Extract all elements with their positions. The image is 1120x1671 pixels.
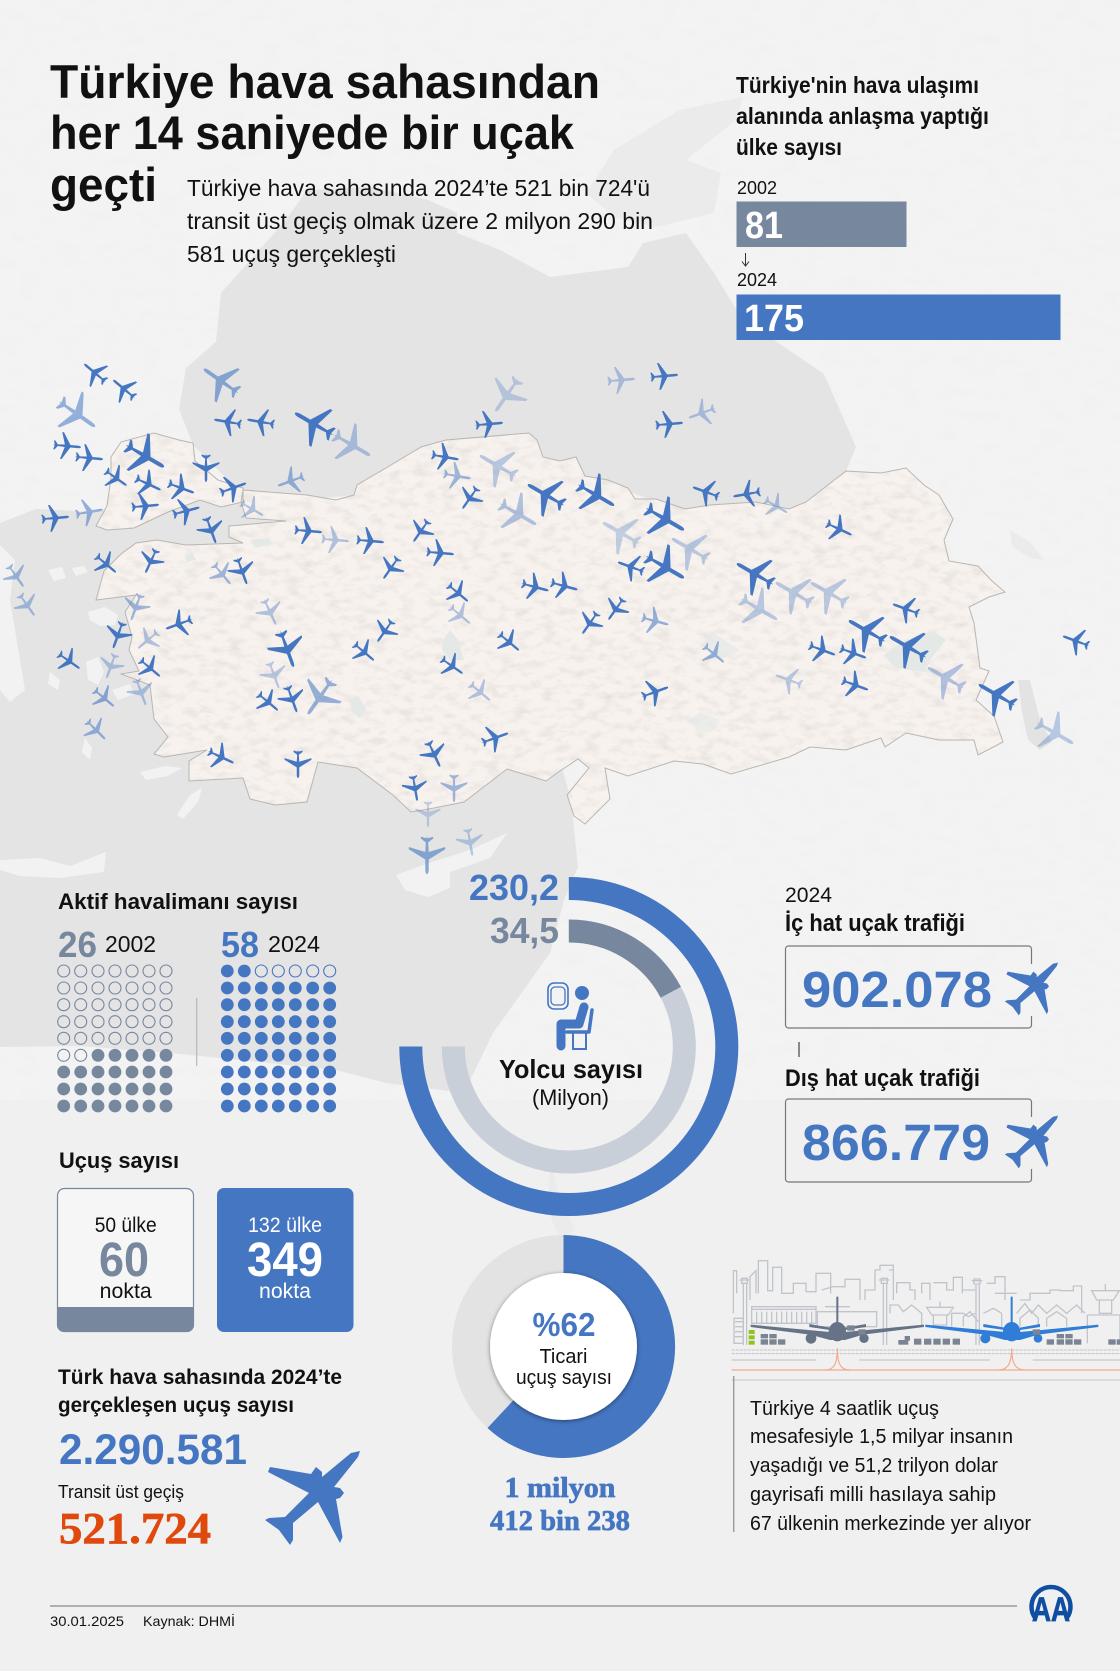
title: Türkiye hava sahasından bbox=[50, 55, 600, 108]
Lake Urmia and Sevan bbox=[548, 530, 1052, 1240]
domestic heading: İç hat uçak trafiği bbox=[785, 910, 965, 937]
skyline bbox=[733, 1261, 1120, 1345]
card 2002: 60 bbox=[99, 1234, 149, 1287]
domestic box bbox=[786, 946, 1058, 1028]
panel: active airports bbox=[57, 889, 336, 1112]
card 2024: nokta bbox=[259, 1280, 311, 1303]
airports 2024 label: 58 bbox=[221, 924, 259, 965]
icon: seated passenger bbox=[548, 983, 592, 1049]
bar 2002 bbox=[736, 178, 906, 247]
source: Kaynak: DHMİ bbox=[143, 1612, 235, 1629]
ring 2024 bbox=[411, 888, 727, 1204]
note text: Türkiye 4 saatlik uçuş bbox=[750, 1397, 939, 1420]
agreement heading bbox=[736, 72, 989, 160]
note text bbox=[750, 1397, 1031, 1535]
Black Sea bbox=[179, 187, 856, 515]
panel: flight points bbox=[57, 1148, 354, 1332]
total flights heading: gerçekleşen uçuş sayısı bbox=[58, 1394, 294, 1417]
subtitle: Türkiye hava sahasında 2024’te 521 bin 724'ü bbox=[187, 175, 650, 201]
international box bbox=[786, 1099, 1058, 1182]
card 2024 bbox=[217, 1188, 354, 1332]
donut label: %62 bbox=[532, 1306, 596, 1343]
panel: commercial flights donut bbox=[452, 1235, 675, 1537]
card 2024: 132 ülke bbox=[248, 1214, 322, 1237]
subtitle: transit üst geçiş olmak üzere 2 milyon 290 bin bbox=[187, 208, 653, 234]
grey aircraft bbox=[751, 1297, 924, 1344]
planes over the map bbox=[0, 352, 1094, 874]
card 2024: 349 bbox=[247, 1234, 323, 1287]
panel: passenger ring chart bbox=[411, 867, 727, 1204]
international heading: Dış hat uçak trafiği bbox=[785, 1065, 980, 1092]
airports 2002 label: 26 bbox=[58, 924, 97, 965]
ring 2002 bbox=[453, 931, 684, 1162]
note text: mesafesiyle 1,5 milyar insanın bbox=[750, 1425, 1013, 1448]
card 2002: 50 ülke bbox=[95, 1214, 157, 1237]
date: 30.01.2025 bbox=[50, 1613, 124, 1629]
dot grid 2002 bbox=[57, 965, 172, 1112]
total flights heading: Türk hava sahasında 2024’te bbox=[58, 1366, 342, 1389]
year label: 2024 bbox=[785, 884, 832, 907]
card 2002: nokta bbox=[100, 1280, 152, 1303]
donut label: Ticari bbox=[540, 1346, 588, 1368]
luggage carts and vehicles bbox=[761, 1325, 1120, 1345]
transit label: Transit üst geçiş bbox=[58, 1482, 184, 1502]
donut bbox=[452, 1235, 675, 1458]
title: her 14 saniyede bir uçak bbox=[50, 106, 575, 159]
bar 2002: 81 bbox=[745, 205, 783, 247]
donut label: uçuş sayısı bbox=[516, 1367, 612, 1389]
ring value 34,5: 34,5 bbox=[490, 910, 559, 951]
note text: gayrisafi milli hasılaya sahip bbox=[750, 1483, 996, 1506]
panel: location note bbox=[734, 1376, 1031, 1535]
illustration: airport bbox=[732, 1261, 1120, 1380]
domestic box: 902.078 bbox=[802, 961, 992, 1018]
transit number: 521.724 bbox=[59, 1504, 211, 1553]
total flights number: 2.290.581 bbox=[59, 1426, 247, 1474]
bar 2024: 2024 bbox=[737, 270, 777, 290]
map of Türkiye bbox=[90, 425, 1015, 830]
airports 2002 label bbox=[58, 924, 156, 965]
airports 2024 label: 2024 bbox=[268, 931, 320, 957]
donut label bbox=[516, 1306, 612, 1389]
AA logo: AA bbox=[1032, 1591, 1070, 1629]
total flights heading bbox=[58, 1366, 342, 1417]
lakes bbox=[185, 538, 946, 732]
subtitle bbox=[187, 175, 653, 267]
dot grid 2024 bbox=[221, 965, 336, 1112]
ring value 230,2: 230,2 bbox=[469, 867, 559, 908]
blue aircraft bbox=[925, 1297, 1098, 1343]
green crates bbox=[749, 1330, 755, 1345]
airports 2024 label bbox=[221, 924, 320, 965]
flights heading: Uçuş sayısı bbox=[59, 1148, 179, 1173]
bar 2024: 175 bbox=[744, 298, 804, 340]
icon: large plane bbox=[265, 1451, 360, 1545]
airports 2002 label: 2002 bbox=[105, 931, 156, 957]
bar 2024 bbox=[736, 270, 1060, 340]
title: geçti bbox=[50, 158, 157, 211]
ring caption: (Milyon) bbox=[532, 1085, 609, 1110]
card 2002 bbox=[57, 1188, 194, 1332]
airports heading: Aktif havalimanı sayısı bbox=[58, 889, 298, 914]
commercial flights value bbox=[490, 1472, 630, 1537]
panel: agreement countries bbox=[736, 72, 1060, 340]
arrow 2002 to 2024 bbox=[742, 253, 749, 266]
panel: total flights bbox=[58, 1366, 360, 1553]
note text: 67 ülkenin merkezinde yer alıyor bbox=[750, 1512, 1031, 1535]
international box: 866.779 bbox=[802, 1114, 990, 1171]
ring caption bbox=[499, 1054, 643, 1110]
footer bbox=[50, 1606, 1017, 1629]
note text: yaşadığı ve 51,2 trilyon dolar bbox=[750, 1454, 998, 1477]
panel: domestic and international traffic bbox=[785, 884, 1058, 1182]
subtitle: 581 uçuş gerçekleşti bbox=[187, 241, 396, 267]
Sea of Azov bbox=[586, 97, 743, 227]
ground markings bbox=[732, 1348, 1120, 1380]
agreement heading: Türkiye'nin hava ulaşımı bbox=[736, 72, 979, 98]
commercial flights value: 412 bin 238 bbox=[490, 1505, 630, 1537]
ring caption: Yolcu sayısı bbox=[499, 1054, 643, 1084]
agreement heading: ülke sayısı bbox=[736, 134, 842, 160]
agreement heading: alanında anlaşma yaptığı bbox=[736, 103, 989, 129]
title bbox=[50, 55, 600, 211]
bar 2002: 2002 bbox=[737, 178, 777, 198]
islands bbox=[0, 545, 507, 897]
Aegean and Mediterranean bbox=[0, 480, 578, 1093]
commercial flights value: 1 milyon bbox=[504, 1472, 616, 1504]
